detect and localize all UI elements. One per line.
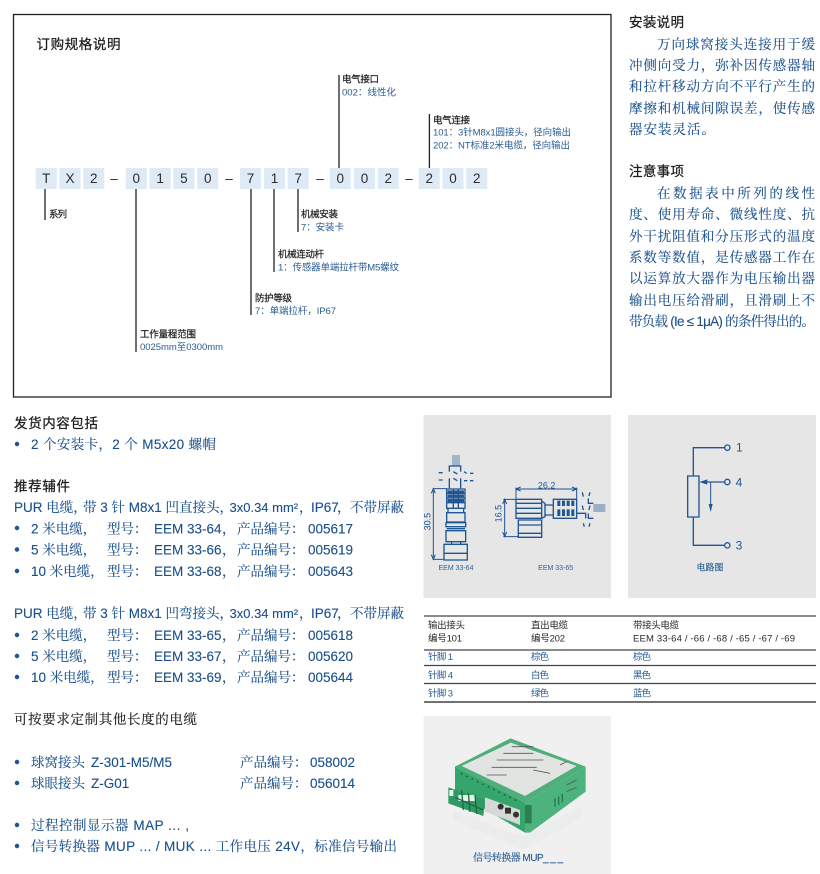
heading: installation notes: 安装说明 — [629, 15, 684, 30]
cable list: angled connector: 产品编号： — [237, 648, 304, 664]
cable list: straight connector: 2 米电缆， — [31, 520, 96, 538]
cable list: angled connector: IP67 — [311, 606, 339, 621]
label: measuring range: 0025mm至0300mm — [140, 342, 223, 353]
cable list: angled connector: 型号： — [107, 648, 148, 664]
label: measuring range — [140, 328, 223, 353]
text block: precautions — [629, 163, 816, 329]
cable list: straight connector: 3x0.34 mm² — [230, 500, 299, 515]
cable list: straight connector: ， — [337, 500, 350, 516]
list: ball joints: 056014 — [310, 776, 356, 791]
cable list: straight connector — [14, 499, 404, 580]
cable list: straight connector: 10 米电缆， — [31, 563, 104, 580]
cable list: angled connector: ， — [222, 628, 236, 644]
code characters: 0 — [449, 171, 457, 186]
code characters: 0 — [204, 171, 211, 186]
paragraph: installation notes: 和拉杆移动方向不平行产生的 — [629, 78, 815, 94]
list: ball joints: 球眼接头 — [31, 775, 85, 791]
label: electrical interface — [342, 74, 396, 98]
list: ball joints: Z-G01 — [91, 776, 129, 791]
cable list: straight connector: 不带屏蔽 — [350, 499, 404, 515]
drawing: straight connector EEM 33-64 — [422, 455, 474, 572]
table: pin assignment — [424, 616, 816, 702]
paragraph: installation notes: 摩擦和机械间隙误差，使传感 — [629, 100, 816, 117]
table rows: 棕色 — [531, 651, 549, 663]
paragraph: precautions: 系数等数值，是传感器工作在 — [629, 249, 815, 266]
cable list: angled connector: 10 米电缆， — [31, 669, 104, 686]
code characters: 0 — [361, 171, 368, 186]
list: related devices — [15, 817, 397, 855]
cable list: angled connector: 产品编号： — [237, 627, 304, 643]
paragraph: precautions: 以运算放大器作为电压输出器 — [629, 270, 816, 286]
list: ball joints: 球窝接头 — [31, 754, 85, 770]
cable list: angled connector: EEM 33-65 — [154, 628, 222, 643]
text block: recommended accessories — [14, 479, 404, 686]
label: measuring range: 工作量程范围 — [140, 328, 196, 340]
cable list: straight connector: 产品编号： — [237, 563, 304, 579]
drawing: angled connector EEM 33-65: EEM 33-65 — [538, 565, 573, 572]
cable list: straight connector: 产品编号： — [237, 542, 304, 558]
paragraph: precautions: 带负载 (Ie ≤ 1μA) 的条件得出的。 — [629, 313, 815, 329]
table header: EEM 33-64 / -66 / -68 / -65 / -67 / -69 — [633, 634, 795, 644]
label: electrical connection — [433, 114, 571, 152]
cable list: straight connector: 型号： — [107, 563, 148, 579]
list: ball joints: 058002 — [310, 755, 355, 770]
cable list: straight connector: 带 3 针 M8x1 凹直接头， — [83, 499, 233, 516]
label: mechanical mounting: 机械安装 — [301, 208, 338, 220]
table header: 编号101 — [428, 632, 462, 644]
code characters: 2 — [385, 171, 392, 186]
code characters: 2 — [90, 171, 98, 186]
paragraph: precautions — [629, 185, 816, 329]
cable list: straight connector: 005617 — [308, 522, 353, 536]
drawing: angled connector EEM 33-65: 26.2 — [538, 480, 555, 490]
cable list: straight connector: ， — [299, 500, 312, 516]
label: protection class: 防护等级 — [255, 292, 292, 304]
cable list: angled connector: ， — [337, 606, 350, 622]
code characters: 7 — [247, 171, 254, 186]
label: electrical connection: 202：NT标准2米电缆，径向输出 — [433, 140, 570, 152]
table rows: 黑色 — [633, 670, 651, 682]
cable list: angled connector: 005618 — [308, 628, 353, 643]
label: electrical interface: 电气接口 — [342, 74, 379, 86]
cable list: angled connector: 产品编号： — [237, 669, 304, 685]
list: ball joints: 产品编号： — [240, 754, 308, 770]
drawing: straight connector EEM 33-64: EEM 33-64 — [439, 565, 474, 572]
panel: connector drawings — [422, 415, 611, 598]
code characters — [42, 171, 481, 186]
leader lines — [45, 75, 429, 352]
drawing: potentiometer circuit: 3 — [736, 539, 743, 553]
paragraph: precautions: 输出电压给滑刷，且滑刷上不 — [629, 292, 816, 309]
code characters: 2 — [425, 171, 433, 186]
cable list: straight connector: ， — [222, 522, 236, 538]
table header: 编号202 — [531, 632, 565, 644]
cable list: angled connector: 005644 — [308, 670, 354, 685]
cable list: straight connector: 005643 — [308, 564, 353, 579]
cable list: straight connector: ， — [222, 542, 236, 558]
paragraph: precautions: 度、使用寿命、微线性度、抗 — [629, 206, 816, 222]
cable list: straight connector: 005619 — [308, 542, 353, 558]
table rows: 蓝色 — [633, 688, 651, 700]
cable list: angled connector: ， — [299, 606, 312, 622]
table rows: 白色 — [531, 670, 549, 682]
drawing: potentiometer circuit: 4 — [736, 475, 743, 489]
panel: ordering code — [14, 14, 611, 397]
caption: MUP: 信号转换器 MUP_ _ _ — [473, 851, 563, 864]
cable list: straight connector: EEM 33-66 — [154, 542, 222, 558]
code characters: 1 — [156, 171, 164, 186]
text block: scope of delivery — [14, 415, 216, 453]
paragraph: installation notes: 万向球窝接头连接用于缓 — [657, 36, 816, 52]
paragraph: precautions: 外干扰阻值和分压形式的温度 — [629, 228, 816, 244]
table rows: 针脚 3 — [428, 688, 453, 700]
code characters: 1 — [271, 171, 278, 186]
drawing: straight connector EEM 33-64: 30.5 — [422, 513, 432, 530]
code characters: 2 — [473, 171, 481, 186]
cable list: angled connector: 005620 — [308, 649, 353, 664]
code characters: 7 — [294, 171, 302, 186]
cable list: straight connector: ， — [222, 564, 236, 580]
label: electrical connection: 101：3针M8x1圆接头，径向输出 — [433, 126, 571, 138]
code characters: 0 — [133, 171, 140, 186]
panel: signal converter photo — [424, 716, 611, 874]
code characters: T — [42, 171, 50, 186]
cable list: angled connector: ， — [222, 649, 236, 665]
paragraph: precautions: 在数据表中所列的线性 — [657, 185, 816, 201]
heading: recommended accessories: 推荐辅件 — [14, 479, 70, 494]
table header — [428, 620, 795, 644]
text block: installation notes — [629, 15, 816, 137]
cable list: straight connector: 产品编号： — [237, 520, 304, 536]
label: series: 系列 — [49, 208, 67, 220]
list: ball joints: 产品编号： — [240, 775, 308, 791]
heading: scope of delivery: 发货内容包括 — [14, 415, 98, 431]
paragraph: installation notes: 器安装灵活。 — [629, 121, 715, 137]
code characters: – — [316, 171, 324, 186]
list: related devices: 信号转换器 MUP ... / MUK ... 工作电压 24V，标准信号输出 — [31, 838, 397, 855]
cable list: straight connector: 型号： — [107, 520, 148, 536]
label: protection class — [255, 292, 336, 317]
cable list: angled connector: 5 米电缆， — [31, 648, 96, 665]
drawing: potentiometer circuit: 1 — [736, 441, 743, 455]
list: related devices: 过程控制显示器 MAP ... , — [31, 817, 189, 833]
cable list: angled connector: 3x0.34 mm² — [230, 606, 299, 621]
cable list: straight connector: IP67 — [311, 500, 339, 515]
cable list: angled connector: PUR 电缆， — [14, 605, 87, 622]
heading: precautions: 注意事项 — [629, 163, 684, 179]
paragraph: installation notes: 冲侧向受力，弥补因传感器轴 — [629, 57, 815, 74]
cable list: angled connector — [14, 605, 404, 686]
table header: 输出接头 — [428, 620, 465, 632]
label: mechanical mounting — [301, 208, 344, 234]
list: ball joints: Z-301-M5/M5 — [91, 755, 172, 770]
illustration: MUP signal converter — [448, 738, 586, 850]
cable list: angled connector: 2 米电缆， — [31, 627, 96, 644]
code boxes — [36, 168, 487, 189]
label: mechanical mounting: 7：安装卡 — [301, 222, 344, 234]
cable list: angled connector: 型号： — [107, 669, 148, 685]
cable list: angled connector: 带 3 针 M8x1 凹弯接头， — [83, 605, 233, 622]
paragraph: installation notes — [629, 36, 816, 137]
table header: 直出电缆 — [531, 620, 568, 632]
label: electrical connection: 电气连接 — [433, 114, 470, 126]
cable list: straight connector: EEM 33-68 — [154, 564, 222, 579]
cable list: angled connector: ， — [222, 670, 236, 686]
code characters: X — [65, 171, 75, 186]
cable list: straight connector: 5 米电缆， — [31, 542, 96, 558]
code characters: 0 — [337, 171, 344, 186]
cable list: straight connector: 型号： — [107, 542, 148, 558]
label: mechanical rod — [278, 248, 399, 274]
label: protection class: 7：单端拉杆，IP67 — [255, 305, 336, 317]
cable list: straight connector: EEM 33-64 — [154, 522, 222, 536]
note: custom cable lengths: 可按要求定制其他长度的电缆 — [14, 711, 198, 727]
table rows: 棕色 — [633, 651, 651, 663]
label: electrical interface: 002：线性化 — [342, 86, 396, 98]
code characters: – — [110, 171, 118, 186]
label: mechanical rod: 1：传感器单端拉杆带M5螺纹 — [278, 262, 399, 274]
label: mechanical rod: 机械连动杆 — [278, 248, 324, 260]
list: ball joints — [15, 754, 356, 791]
cable list: straight connector: PUR 电缆， — [14, 499, 87, 516]
cable list: angled connector: EEM 33-67 — [154, 649, 222, 664]
table rows: 针脚 4 — [428, 670, 453, 682]
table header: 带接头电缆 — [633, 620, 679, 632]
list item: delivery: 2 个安装卡，2 个 M5x20 螺帽 — [31, 436, 216, 453]
panel: circuit diagram — [628, 415, 816, 598]
drawing: potentiometer circuit: 电路图 — [697, 562, 723, 573]
table rows — [428, 651, 651, 700]
code characters: – — [225, 171, 233, 186]
drawing: potentiometer circuit — [688, 441, 743, 573]
cable list: angled connector: 不带屏蔽 — [350, 605, 404, 621]
code characters: – — [405, 171, 413, 186]
table rows: 绿色 — [531, 688, 549, 700]
heading: ordering code: 订购规格说明 — [36, 37, 120, 52]
drawing: angled connector EEM 33-65 — [493, 480, 605, 572]
cable list: angled connector: 型号： — [107, 627, 148, 643]
table rows: 针脚 1 — [428, 651, 453, 663]
code characters: 5 — [180, 171, 188, 186]
drawing: angled connector EEM 33-65: 16.5 — [493, 505, 503, 522]
cable list: angled connector: EEM 33-69 — [154, 670, 222, 685]
